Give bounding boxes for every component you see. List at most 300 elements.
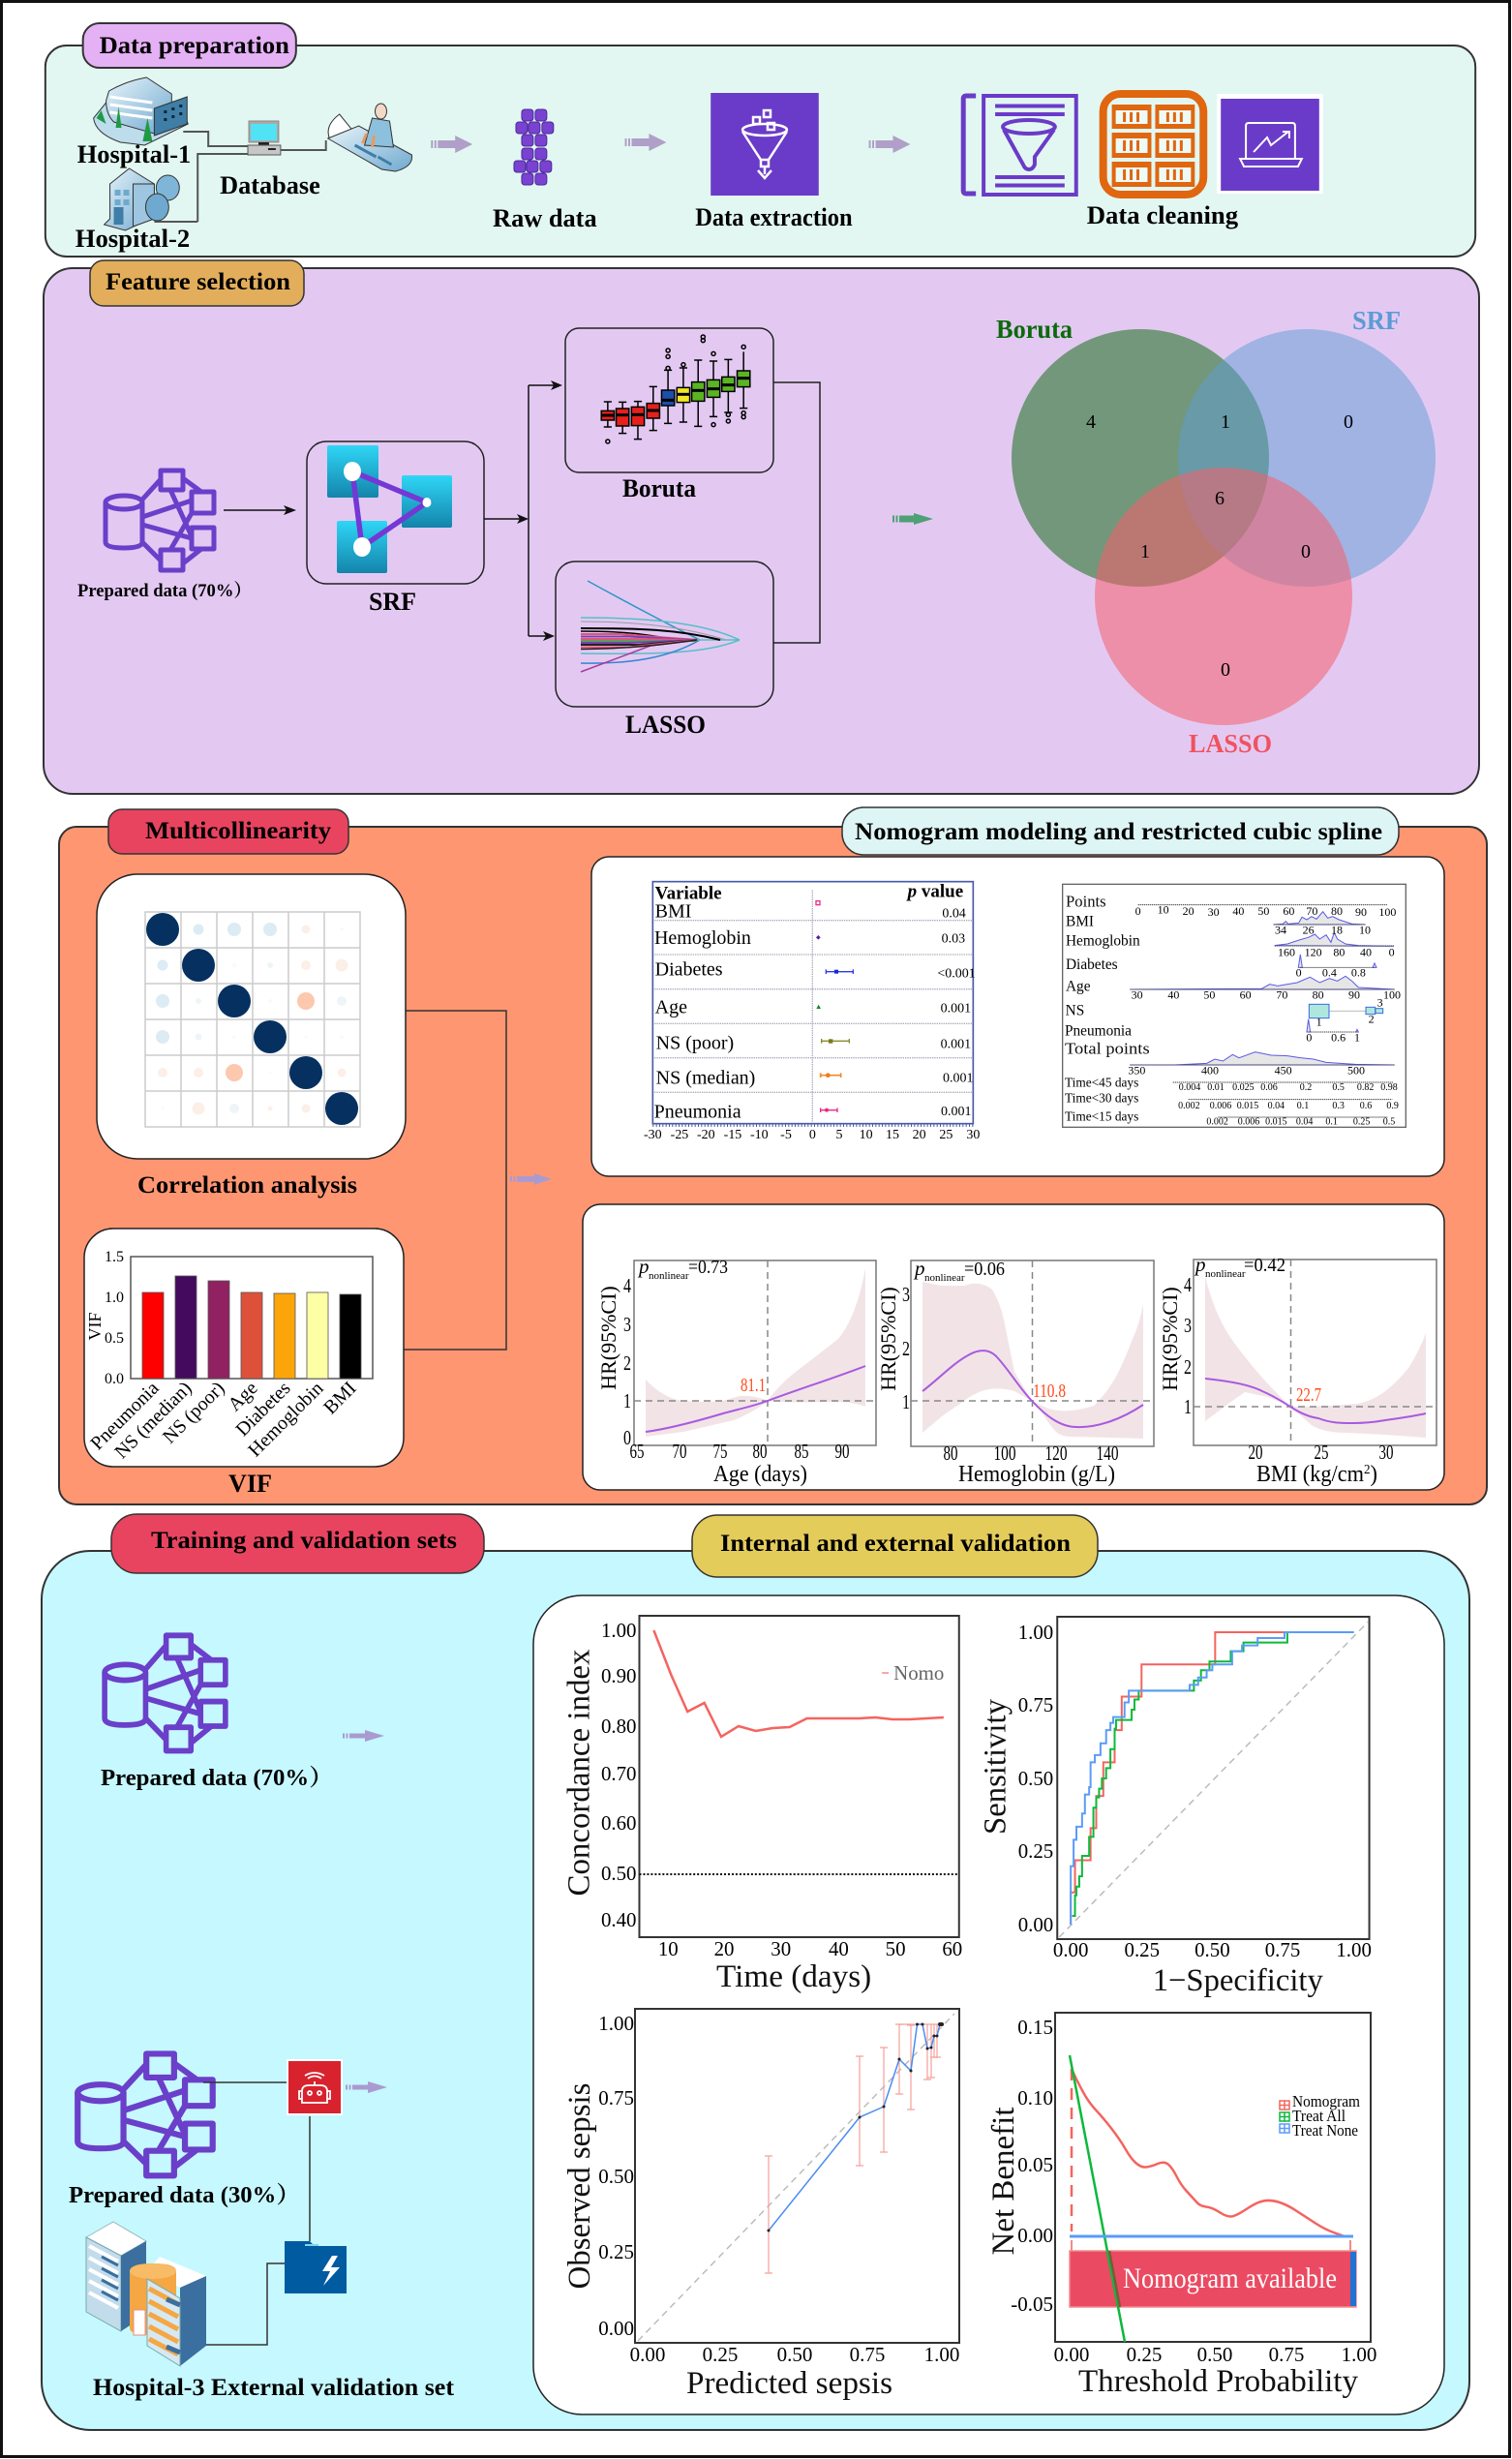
chart: nomogram: 60 bbox=[1240, 988, 1252, 1002]
chart: spline hemoglobin: 140 bbox=[1096, 1442, 1119, 1465]
label: Database: Database bbox=[220, 171, 320, 199]
chart: spline BMI: 20 bbox=[1249, 1441, 1262, 1464]
chart: nomogram: 0.98 bbox=[1380, 1082, 1398, 1093]
icon: prepared data 70% network bbox=[105, 1635, 226, 1750]
chart: ROC curves: 1−Specificity bbox=[1153, 1963, 1323, 1998]
heading: multicollinearity: Multicollinearity bbox=[145, 818, 332, 844]
chart: calibration: Predicted sepsis bbox=[686, 2366, 892, 2401]
chart: nomogram: Time<45 days bbox=[1065, 1076, 1138, 1090]
panel: VIF bar chart: Diabetes bbox=[231, 1378, 295, 1441]
chart: spline age bbox=[596, 1255, 876, 1487]
chart: spline age: 3 bbox=[623, 1313, 631, 1336]
chart: spline age: 65 bbox=[629, 1440, 645, 1463]
chart: concordance index: Nomo bbox=[893, 1661, 944, 1685]
chart: nomogram: 350 bbox=[1128, 1063, 1145, 1077]
chart: decision curve: 0.25 bbox=[1127, 2343, 1162, 2366]
chart: ROC curves: 0.50 bbox=[1018, 1767, 1053, 1790]
chart: forest plot: -5 bbox=[780, 1128, 792, 1142]
chart: nomogram: Time<30 days bbox=[1065, 1091, 1138, 1106]
chart: decision curve: Nomogram available bbox=[1123, 2262, 1337, 2294]
heading: multicollinearity bbox=[108, 809, 348, 854]
chart: Venn diagram: 0 bbox=[1301, 541, 1311, 562]
chart: nomogram: 450 bbox=[1275, 1063, 1292, 1077]
chart: spline hemoglobin: 100 bbox=[993, 1442, 1016, 1465]
chart: nomogram: 0.002 bbox=[1178, 1101, 1200, 1111]
chart: nomogram: 0.5 bbox=[1332, 1082, 1345, 1093]
icon: data cleaning table bbox=[1104, 94, 1203, 195]
chart: concordance index: 0.80 bbox=[601, 1715, 636, 1738]
chart: spline hemoglobin: p bbox=[913, 1257, 925, 1280]
chart: spline age: =0.73 bbox=[688, 1257, 728, 1278]
chart: decision curve: Treat All bbox=[1292, 2107, 1346, 2125]
icon: external data folder bbox=[285, 2241, 347, 2293]
chart: nomogram: 0.015 bbox=[1237, 1101, 1258, 1111]
chart: spline age: 81.1 bbox=[741, 1375, 766, 1396]
icon: prepared data network bbox=[106, 471, 214, 570]
chart: nomogram: 400 bbox=[1201, 1063, 1219, 1077]
chart: calibration: 0.75 bbox=[598, 2086, 634, 2110]
chart: concordance index: 0.50 bbox=[601, 1862, 636, 1885]
chart: Venn diagram: 1 bbox=[1221, 411, 1230, 433]
chart: nomogram: Hemoglobin bbox=[1066, 933, 1140, 950]
chart: spline BMI: HR(95%CI) bbox=[1158, 1287, 1182, 1391]
panel: SRF bbox=[307, 441, 484, 584]
chart: nomogram: 90 bbox=[1355, 905, 1367, 919]
chart: forest plot: BMI bbox=[655, 900, 691, 922]
chart: forest plot: p value bbox=[906, 882, 963, 902]
chart: ROC curves: 1.00 bbox=[1018, 1621, 1053, 1644]
chart: Venn diagram: Boruta bbox=[996, 315, 1073, 344]
chart: nomogram: 0.006 bbox=[1210, 1101, 1231, 1111]
chart: concordance index: Time (days) bbox=[716, 1959, 871, 1994]
chart: ROC curves: 0.75 bbox=[1265, 1938, 1300, 1961]
chart: decision curve: -0.05 bbox=[1011, 2292, 1053, 2316]
chart: concordance index: 60 bbox=[942, 1937, 962, 1960]
icon: hospital 1 bbox=[94, 77, 188, 145]
chart: nomogram: NS bbox=[1066, 1002, 1084, 1018]
icon: prepared data 30% network bbox=[77, 2053, 213, 2175]
icon: hospital 2 bbox=[105, 168, 179, 230]
chart: decision curve: Treat None bbox=[1292, 2121, 1358, 2140]
heading: internal and external validation bbox=[692, 1515, 1098, 1577]
chart: Venn diagram: 6 bbox=[1215, 488, 1225, 509]
chart: nomogram: 120 bbox=[1305, 945, 1322, 958]
chart: forest plot: 0.04 bbox=[942, 907, 966, 922]
chart: concordance index: 20 bbox=[714, 1937, 734, 1960]
chart: forest plot bbox=[644, 882, 980, 1142]
chart: spline hemoglobin: 80 bbox=[943, 1442, 958, 1465]
chart: calibration: 0.25 bbox=[703, 2343, 738, 2366]
chart: nomogram: 0.002 bbox=[1206, 1117, 1228, 1128]
chart: spline BMI: 2 bbox=[1184, 1355, 1192, 1379]
icon: data extraction funnel bbox=[711, 93, 819, 196]
chart: decision curve bbox=[986, 2013, 1376, 2399]
label: Hospital-1: Hospital-1 bbox=[77, 140, 191, 168]
chart: Venn diagram: LASSO bbox=[1189, 729, 1272, 758]
chart: spline age: Age (days) bbox=[713, 1462, 807, 1487]
panel: VIF bar chart: BMI bbox=[319, 1378, 361, 1418]
label: Hospital-2: Hospital-2 bbox=[76, 225, 190, 253]
heading: nomogram modeling bbox=[842, 807, 1399, 855]
chart: nomogram: 0.04 bbox=[1296, 1117, 1313, 1128]
chart: nomogram: Age bbox=[1066, 978, 1091, 994]
chart: calibration: Observed sepsis bbox=[562, 2083, 597, 2289]
chart: forest plot: 0.03 bbox=[942, 931, 965, 946]
chart: nomogram: 0.4 bbox=[1322, 965, 1337, 979]
chart: forest plot: -25 bbox=[671, 1128, 688, 1142]
chart: decision curve: Nomogram bbox=[1292, 2092, 1360, 2110]
chart: spline BMI: 25 bbox=[1315, 1441, 1328, 1464]
chart: decision curve: 0.00 bbox=[1017, 2224, 1053, 2247]
chart: concordance index bbox=[562, 1616, 962, 1994]
chart: nomogram: Total points bbox=[1065, 1039, 1150, 1057]
icon: data cleaning laptop bbox=[1217, 94, 1323, 194]
panel: VIF bar chart: 0.0 bbox=[105, 1371, 124, 1387]
chart: spline BMI: 2 bbox=[1364, 1463, 1371, 1477]
chart: nomogram: 50 bbox=[1203, 988, 1215, 1002]
chart: Venn diagram: 4 bbox=[1086, 411, 1096, 433]
chart: nomogram: 0 bbox=[1306, 1031, 1312, 1045]
label: LASSO: LASSO bbox=[625, 711, 706, 739]
chart: concordance index: 0.90 bbox=[601, 1664, 636, 1687]
chart: nomogram: 18 bbox=[1331, 923, 1343, 936]
chart: ROC curves: 0.00 bbox=[1018, 1913, 1053, 1936]
chart: ROC curves: 0.50 bbox=[1194, 1938, 1230, 1961]
chart: spline age: 4 bbox=[623, 1274, 631, 1297]
chart: nomogram: 0.1 bbox=[1297, 1101, 1309, 1111]
chart: concordance index: 50 bbox=[886, 1937, 906, 1960]
chart: spline BMI: 22.7 bbox=[1296, 1384, 1321, 1406]
label: Data extraction: Data extraction bbox=[695, 203, 853, 231]
chart: forest plot: 5 bbox=[835, 1128, 842, 1142]
chart: nomogram: 1 bbox=[1316, 1015, 1322, 1028]
chart: concordance index: Concordance index bbox=[562, 1649, 597, 1896]
chart: ROC curves: 0.25 bbox=[1018, 1839, 1053, 1863]
heading: data preparation bbox=[83, 23, 296, 68]
chart: decision curve: 0.05 bbox=[1017, 2153, 1053, 2176]
chart: nomogram: 0.6 bbox=[1331, 1031, 1346, 1045]
panel: modelling bbox=[59, 807, 1487, 1504]
chart: forest plot: 0.001 bbox=[943, 1071, 973, 1085]
label: prepared data 70%: Prepared data (70%） bbox=[101, 1766, 333, 1791]
chart: Venn diagram: 1 bbox=[1140, 541, 1150, 562]
chart: ROC curves bbox=[979, 1617, 1372, 1998]
chart: forest plot: -20 bbox=[697, 1128, 715, 1142]
panel: LASSO coefficient paths bbox=[556, 562, 773, 707]
panel: VIF bar chart: Age bbox=[224, 1378, 262, 1415]
chart: forest plot: 0.001 bbox=[941, 1001, 971, 1016]
chart: forest plot: Pneumonia bbox=[654, 1101, 741, 1122]
panel: VIF bar chart: VIF bbox=[85, 1312, 105, 1341]
panel: forest plot and nomogram bbox=[591, 857, 1444, 1176]
arrow: to Venn bbox=[892, 513, 933, 525]
panel: Boruta boxplot bbox=[565, 328, 773, 472]
chart: spline hemoglobin: 3 bbox=[902, 1283, 910, 1306]
chart: spline age: 70 bbox=[672, 1440, 687, 1463]
label: Boruta: Boruta bbox=[622, 474, 696, 502]
panel: VIF bar chart: 0.5 bbox=[105, 1330, 124, 1347]
chart: spline BMI bbox=[1158, 1253, 1436, 1487]
label: SRF: SRF bbox=[369, 588, 416, 616]
chart: calibration: 1.00 bbox=[598, 2012, 634, 2035]
chart: spline BMI: =0.42 bbox=[1244, 1255, 1285, 1276]
arrow: hospitals to raw data bbox=[431, 136, 472, 153]
chart: nomogram: 500 bbox=[1347, 1063, 1365, 1077]
chart: forest plot: -10 bbox=[750, 1128, 769, 1142]
chart: spline BMI: ) bbox=[1371, 1462, 1377, 1487]
chart: forest plot: Hemoglobin bbox=[654, 927, 751, 949]
chart: calibration: 0.75 bbox=[850, 2343, 885, 2366]
panel: VIF bar chart: 1.0 bbox=[105, 1290, 124, 1306]
chart: nomogram: Diabetes bbox=[1066, 956, 1118, 973]
heading: feature selection bbox=[90, 260, 304, 306]
chart: forest plot: 0.001 bbox=[941, 1105, 971, 1119]
chart: nomogram: 0.3 bbox=[1332, 1101, 1345, 1111]
chart: spline age: 1 bbox=[623, 1389, 631, 1412]
panel: restricted cubic splines bbox=[583, 1204, 1444, 1490]
panel: VIF bar chart: 1.5 bbox=[105, 1249, 124, 1265]
chart: concordance index: 40 bbox=[829, 1937, 849, 1960]
label: VIF: VIF bbox=[228, 1470, 272, 1498]
heading: training and validation sets bbox=[111, 1514, 484, 1573]
chart: nomogram: 0.5 bbox=[1383, 1117, 1395, 1128]
chart: calibration: 0.25 bbox=[598, 2240, 634, 2263]
chart: forest plot: 10 bbox=[860, 1128, 873, 1142]
chart: Venn diagram bbox=[996, 306, 1436, 758]
chart: concordance index: 0.70 bbox=[601, 1762, 636, 1785]
chart: nomogram: 0 bbox=[1296, 965, 1302, 979]
chart: nomogram: 70 bbox=[1276, 988, 1287, 1002]
panel: validation bbox=[42, 1514, 1469, 2430]
heading: data preparation: Data preparation bbox=[100, 33, 289, 59]
chart: spline age: p bbox=[637, 1255, 649, 1278]
chart: forest plot: -30 bbox=[644, 1128, 662, 1142]
label: correlation analysis: Correlation analysis bbox=[137, 1172, 357, 1199]
panel: validation charts bbox=[533, 1595, 1444, 2414]
label: prepared data 70%: Prepared data (70%） bbox=[77, 580, 252, 601]
chart: nomogram: 100 bbox=[1383, 988, 1401, 1002]
chart: spline BMI: p bbox=[1194, 1253, 1206, 1276]
chart: spline hemoglobin: 2 bbox=[902, 1337, 910, 1360]
chart: spline age: nonlinear bbox=[649, 1270, 689, 1282]
chart: Venn diagram: 0 bbox=[1344, 411, 1353, 433]
chart: spline hemoglobin: =0.06 bbox=[964, 1259, 1005, 1280]
chart: forest plot: <0.001 bbox=[937, 966, 976, 981]
chart: nomogram: 0.06 bbox=[1260, 1082, 1278, 1093]
chart: nomogram: 0 bbox=[1135, 904, 1141, 918]
panel: VIF bar chart: NS (median) bbox=[110, 1378, 197, 1463]
chart: nomogram: 2 bbox=[1369, 1013, 1375, 1026]
icon: hospital 3 servers bbox=[86, 2222, 206, 2366]
panel: VIF bar chart: Pneumonia bbox=[86, 1378, 164, 1454]
panel: correlation matrix bbox=[97, 874, 406, 1159]
chart: nomogram: Points bbox=[1066, 893, 1106, 911]
heading: nomogram modeling: Nomogram modeling and restricted cubic spline bbox=[855, 819, 1382, 845]
chart: ROC curves: 0.75 bbox=[1018, 1693, 1053, 1716]
chart: spline age: HR(95%CI) bbox=[596, 1286, 620, 1390]
chart: nomogram: 0.015 bbox=[1265, 1117, 1287, 1128]
chart: nomogram: 50 bbox=[1257, 904, 1269, 918]
arrow: validation to charts bbox=[346, 2081, 387, 2093]
chart: nomogram bbox=[1063, 884, 1406, 1128]
chart: nomogram: 0.01 bbox=[1207, 1082, 1225, 1093]
chart: nomogram: 80 bbox=[1333, 945, 1345, 958]
connector: Boruta and LASSO to Venn bbox=[773, 382, 820, 643]
chart: decision curve: 0.15 bbox=[1017, 2016, 1053, 2039]
chart: forest plot: Variable bbox=[655, 884, 722, 904]
connector: left panels to right panels bbox=[404, 1011, 506, 1350]
chart: calibration: 0.00 bbox=[598, 2317, 634, 2340]
chart: spline hemoglobin bbox=[876, 1257, 1154, 1487]
chart: nomogram: Time<15 days bbox=[1065, 1108, 1138, 1123]
arrow: data to SRF bbox=[224, 505, 296, 515]
label: Data cleaning: Data cleaning bbox=[1087, 201, 1238, 229]
chart: spline BMI: nonlinear bbox=[1205, 1268, 1246, 1280]
chart: concordance index: 30 bbox=[771, 1937, 791, 1960]
chart: nomogram: 160 bbox=[1278, 945, 1295, 958]
chart: decision curve: 0.10 bbox=[1017, 2086, 1053, 2110]
chart: forest plot: -15 bbox=[724, 1128, 741, 1142]
chart: spline age: 85 bbox=[794, 1440, 809, 1463]
panel: VIF bar chart: Hemoglobin bbox=[244, 1378, 328, 1461]
connector lines: hospitals to database bbox=[154, 132, 326, 222]
arrow: extraction to cleaning bbox=[869, 136, 910, 153]
chart: nomogram: 0.1 bbox=[1325, 1117, 1338, 1128]
chart: ROC curves: 0.00 bbox=[1053, 1938, 1088, 1961]
chart: ROC curves: Sensitivity bbox=[979, 1698, 1013, 1835]
chart: nomogram: 20 bbox=[1183, 904, 1194, 918]
chart: nomogram: 0.025 bbox=[1232, 1082, 1255, 1093]
chart: spline age: 0 bbox=[623, 1426, 631, 1449]
chart: nomogram: 0.6 bbox=[1360, 1101, 1372, 1111]
chart: decision curve: 0.50 bbox=[1197, 2343, 1232, 2366]
chart: nomogram: 80 bbox=[1313, 988, 1324, 1002]
chart: spline hemoglobin: 110.8 bbox=[1033, 1381, 1066, 1402]
arrow: training to charts bbox=[343, 1730, 384, 1742]
chart: nomogram: 10 bbox=[1158, 902, 1169, 916]
chart: spline age: 80 bbox=[753, 1440, 767, 1463]
chart: calibration: 0.50 bbox=[598, 2165, 634, 2188]
chart: nomogram: 30 bbox=[1208, 905, 1220, 919]
chart: nomogram: 0.04 bbox=[1268, 1101, 1285, 1111]
chart: spline hemoglobin: nonlinear bbox=[924, 1272, 965, 1284]
icon: robot model bbox=[287, 2059, 343, 2115]
icon: data cleaning document funnel bbox=[963, 96, 1076, 195]
chart: nomogram: 0.004 bbox=[1179, 1082, 1200, 1093]
icon: raw data bbox=[514, 109, 554, 185]
chart: Venn diagram: 0 bbox=[1221, 659, 1230, 681]
chart: concordance index: 1.00 bbox=[601, 1619, 636, 1642]
arrow: to models bbox=[510, 1173, 552, 1185]
chart: Venn diagram: SRF bbox=[1352, 306, 1401, 335]
chart: ROC curves: 1.00 bbox=[1336, 1938, 1372, 1961]
chart: forest plot: 0 bbox=[809, 1128, 816, 1142]
chart: nomogram: 26 bbox=[1303, 923, 1315, 936]
chart: spline hemoglobin: 1 bbox=[902, 1390, 910, 1413]
chart: spline hemoglobin: 120 bbox=[1045, 1442, 1067, 1465]
chart: calibration: 0.50 bbox=[777, 2343, 812, 2366]
chart: forest plot: NS (poor) bbox=[656, 1032, 734, 1053]
chart: nomogram: Pneumonia bbox=[1065, 1022, 1132, 1039]
chart: ROC curves: 0.25 bbox=[1125, 1938, 1160, 1961]
chart: nomogram: 80 bbox=[1331, 904, 1343, 918]
chart: nomogram: 0.006 bbox=[1238, 1117, 1259, 1128]
panel: data preparation bbox=[45, 23, 1475, 257]
chart: nomogram: 30 bbox=[1132, 988, 1143, 1002]
chart: forest plot: 20 bbox=[913, 1128, 926, 1142]
chart: nomogram: 60 bbox=[1283, 904, 1294, 918]
icon: analyst at desk bbox=[328, 104, 412, 171]
chart: spline BMI: 30 bbox=[1378, 1441, 1394, 1464]
label: Hospital-3 external validation set: Hospital-3 External validation set bbox=[93, 2375, 455, 2401]
chart: nomogram: 40 bbox=[1167, 988, 1179, 1002]
connectors: validation data sources bbox=[203, 2082, 310, 2345]
chart: forest plot: 30 bbox=[966, 1128, 980, 1142]
chart: forest plot: 15 bbox=[886, 1128, 899, 1142]
chart: forest plot: Diabetes bbox=[655, 959, 723, 981]
chart: spline BMI: 1 bbox=[1184, 1395, 1192, 1418]
chart: calibration bbox=[562, 2009, 959, 2401]
chart: decision curve: 0.00 bbox=[1054, 2343, 1089, 2366]
chart: forest plot: Age bbox=[655, 997, 687, 1018]
icon: database computer bbox=[248, 121, 281, 155]
chart: nomogram: BMI bbox=[1066, 914, 1094, 930]
chart: nomogram: 40 bbox=[1360, 945, 1372, 958]
chart: concordance index: 0.60 bbox=[601, 1811, 636, 1835]
chart: spline age: 2 bbox=[623, 1351, 631, 1375]
chart: nomogram: 0.2 bbox=[1300, 1082, 1312, 1093]
chart: spline BMI: 4 bbox=[1184, 1273, 1192, 1296]
chart: nomogram: 0.9 bbox=[1386, 1101, 1399, 1111]
chart: nomogram: 90 bbox=[1348, 988, 1360, 1002]
chart: nomogram: 34 bbox=[1275, 923, 1286, 936]
chart: nomogram: 40 bbox=[1232, 904, 1244, 918]
chart: nomogram: 0.25 bbox=[1353, 1117, 1370, 1128]
chart: nomogram: 100 bbox=[1378, 905, 1396, 919]
chart: forest plot: 25 bbox=[939, 1128, 953, 1142]
chart: spline age: 75 bbox=[712, 1440, 728, 1463]
heading: feature selection: Feature selection bbox=[106, 269, 290, 295]
chart: decision curve: 0.75 bbox=[1269, 2343, 1304, 2366]
heading: internal and external validation: Internal and external validation bbox=[720, 1531, 1071, 1557]
chart: decision curve: Net Benefit bbox=[986, 2107, 1021, 2256]
chart: concordance index: 10 bbox=[658, 1937, 679, 1960]
chart: nomogram: 0.8 bbox=[1351, 965, 1366, 979]
chart: forest plot: NS (median) bbox=[656, 1067, 755, 1088]
arrows: SRF to Boruta and LASSO bbox=[484, 380, 562, 641]
chart: calibration: 1.00 bbox=[924, 2343, 959, 2366]
label: Raw data: Raw data bbox=[493, 204, 597, 232]
chart: nomogram: 10 bbox=[1359, 923, 1371, 936]
chart: nomogram: 0 bbox=[1389, 945, 1395, 958]
chart: spline BMI: BMI (kg/cm bbox=[1256, 1462, 1372, 1487]
chart: forest plot: 0.001 bbox=[941, 1037, 971, 1051]
chart: calibration: 0.00 bbox=[630, 2343, 665, 2366]
arrow: raw data to extraction bbox=[625, 134, 666, 151]
chart: nomogram: 70 bbox=[1306, 904, 1317, 918]
heading: training and validation sets: Training and validation sets bbox=[151, 1528, 457, 1554]
chart: spline BMI: 3 bbox=[1184, 1314, 1192, 1337]
label: prepared data 30%: Prepared data (30%） bbox=[69, 2183, 300, 2208]
chart: decision curve: Threshold Probability bbox=[1078, 2364, 1358, 2399]
chart: concordance index: 0.40 bbox=[601, 1908, 636, 1931]
chart: decision curve: 1.00 bbox=[1342, 2343, 1376, 2366]
panel: feature selection bbox=[44, 260, 1479, 794]
panel: VIF bar chart bbox=[84, 1229, 404, 1467]
chart: nomogram: 0.82 bbox=[1357, 1082, 1374, 1093]
chart: spline age: 90 bbox=[834, 1440, 850, 1463]
chart: nomogram: 1 bbox=[1354, 1031, 1360, 1045]
